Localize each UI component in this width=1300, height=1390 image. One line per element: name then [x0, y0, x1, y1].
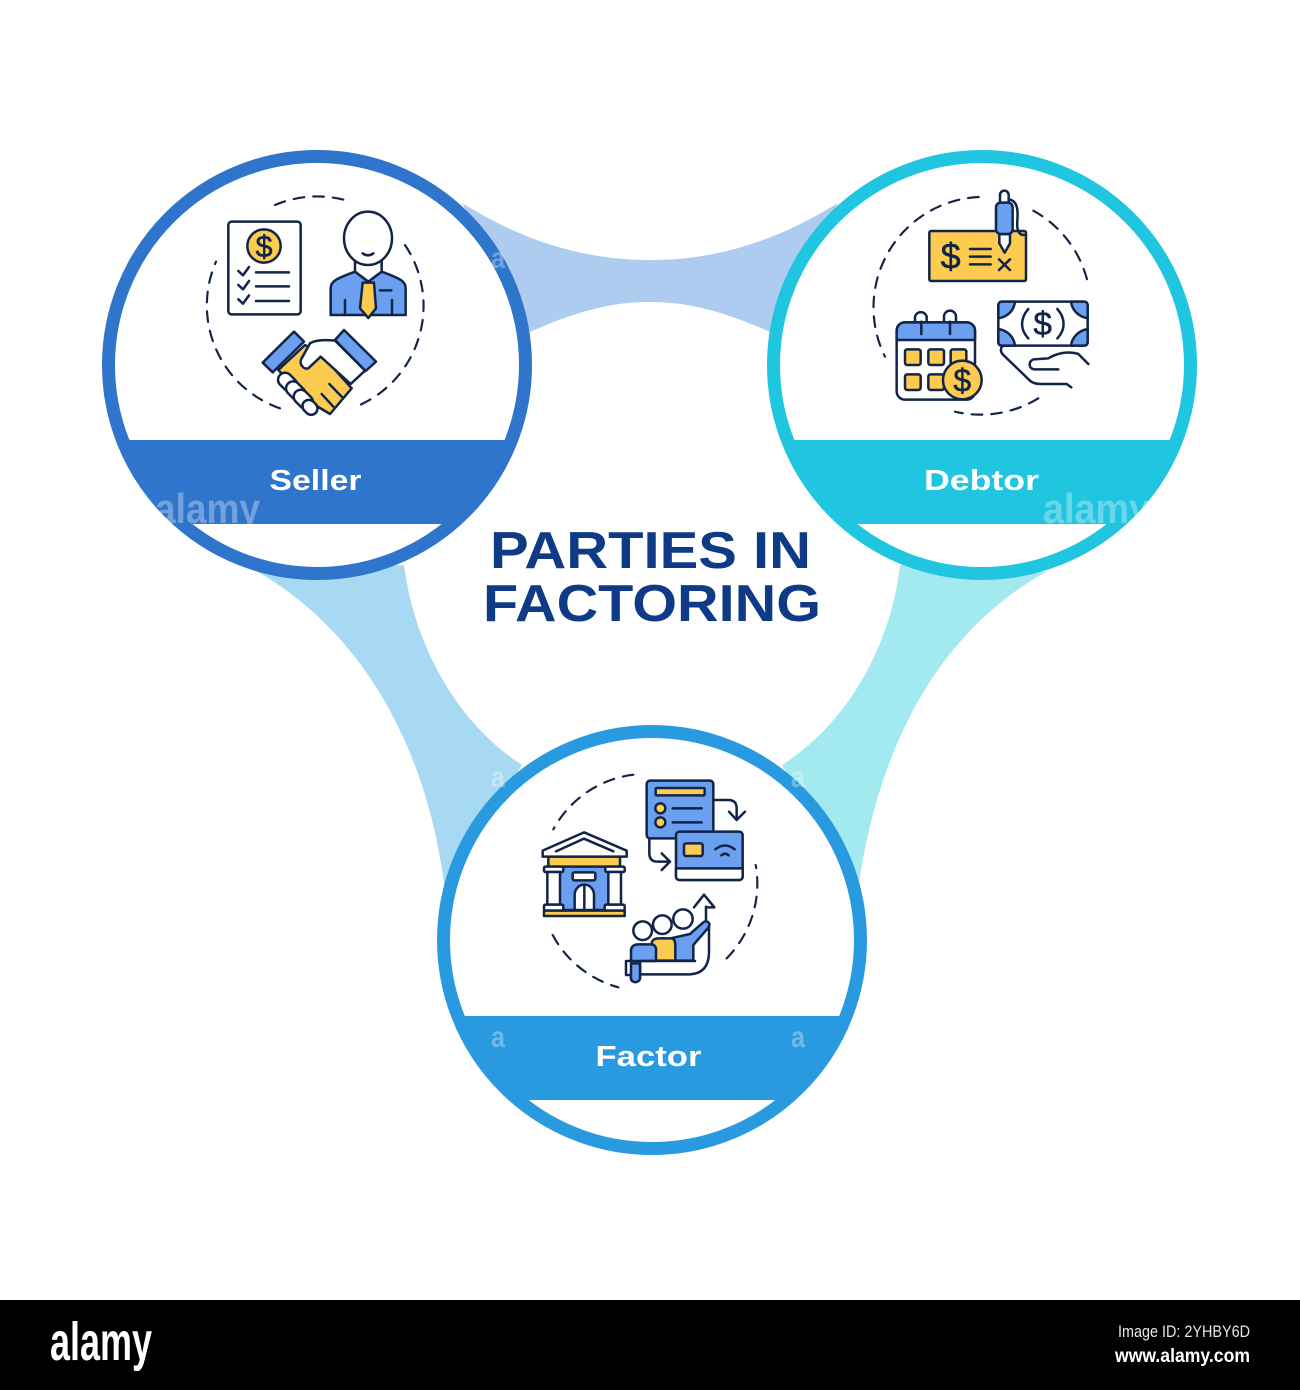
title: [483, 522, 821, 633]
watermark marks: alamy: [155, 485, 261, 532]
seller label band: [130, 440, 504, 524]
panel: factor: [435, 732, 869, 1148]
icon: businessman: [331, 212, 406, 318]
dashed ring: [873, 197, 1089, 415]
debtor label: Debtor: [924, 465, 1039, 497]
debtor label band: [794, 440, 1170, 524]
watermark marks: alamy: [1043, 485, 1151, 532]
factor label band: [464, 1016, 840, 1100]
dashed ring: [207, 196, 424, 408]
seller icon group: [207, 196, 424, 417]
icon: banknote in hand: [998, 302, 1088, 387]
connector: seller to debtor: [462, 203, 838, 332]
footer image id: Image ID: 2YHBY6D: [1118, 1322, 1250, 1341]
seller circle: [108, 156, 526, 574]
icon: bank building: [543, 832, 627, 916]
panel: debtor: [765, 156, 1199, 574]
connector: seller to factor: [258, 565, 522, 890]
footer logo: alamy: [50, 1312, 152, 1372]
watermark marks: a: [491, 1021, 505, 1054]
icon: document with dollar coin: [228, 222, 301, 314]
debtor icon group: [873, 191, 1089, 415]
title: FACTORING: [483, 575, 821, 633]
watermark marks: a: [791, 761, 805, 794]
icon: handshake: [263, 330, 376, 417]
watermark marks: [155, 242, 1151, 1054]
seller label: Seller: [270, 465, 362, 497]
icon: document and card exchange: [647, 781, 745, 880]
panel: seller: [100, 156, 534, 574]
icon: calendar with coin: [897, 311, 982, 400]
watermark marks: a: [491, 242, 505, 275]
watermark marks: a: [791, 1021, 805, 1054]
factor icon group: [543, 775, 757, 987]
dashed ring: [553, 775, 757, 987]
watermark marks: a: [491, 761, 505, 794]
icon: growing team: [626, 895, 714, 982]
icon: banknote in hand: $: [1033, 306, 1052, 343]
icon: document with dollar coin: $: [255, 230, 273, 264]
title: PARTIES IN: [490, 522, 811, 580]
icon: signed cheque with pen: [929, 191, 1026, 281]
factor label: Factor: [596, 1041, 702, 1073]
icon: calendar with coin: $: [953, 363, 971, 399]
footer url: www.alamy.com: [1114, 1346, 1250, 1367]
factor circle: [444, 732, 860, 1148]
connector: debtor to factor: [782, 565, 1046, 890]
footer bar: [0, 1300, 1300, 1390]
debtor circle: [774, 156, 1190, 574]
icon: signed cheque with pen: $: [941, 235, 961, 276]
